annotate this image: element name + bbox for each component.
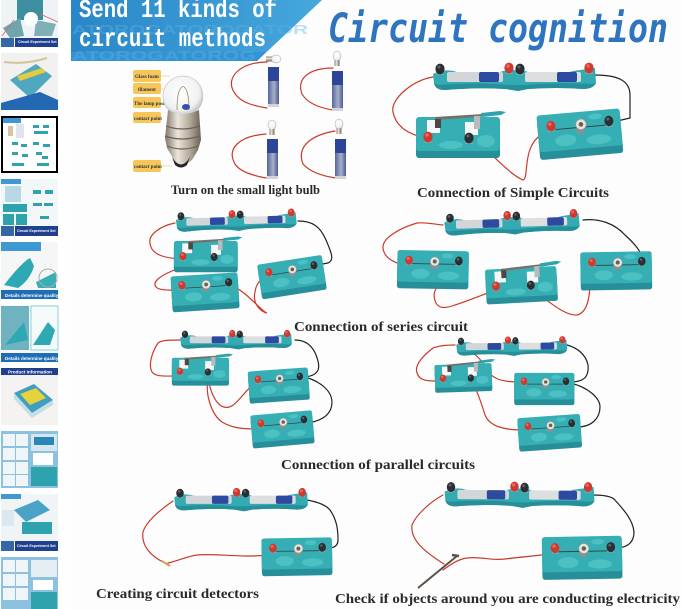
banner pattern: ATOROGATOROG bbox=[72, 48, 256, 63]
thumbnail: kit contents bbox=[1, 431, 58, 488]
panel: small light bulb bbox=[133, 51, 346, 197]
caption: Creating circuit detectors bbox=[96, 587, 260, 602]
panel: series circuit 2 bbox=[383, 209, 652, 315]
bulb part labels: filament bbox=[138, 88, 156, 93]
bulb part labels: The lamp post bbox=[134, 102, 165, 107]
thumbnail: video: Circuit Experiment Set bbox=[18, 40, 57, 44]
caption: Check if objects around you are conducting electricity bbox=[335, 592, 680, 607]
panel: parallel circuit 2 bbox=[416, 336, 600, 452]
thumbnail: video bbox=[1, 0, 58, 47]
thumbnail: STEM set: Circuit Experiment Set bbox=[17, 229, 56, 233]
caption: Turn on the small light bulb bbox=[171, 182, 320, 197]
thumbnail: spring clip comparison bbox=[1, 305, 59, 362]
bulb part labels: Glass foam bbox=[135, 75, 160, 80]
thumbnail: hot clip connections: Details determine quality bbox=[5, 293, 59, 298]
thumbnail: selected overview bbox=[1, 116, 58, 173]
bulb part labels: contact point bbox=[134, 165, 162, 170]
banner bbox=[71, 0, 322, 63]
banner text: circuit methods bbox=[79, 24, 266, 54]
bulb part labels: contact point bbox=[134, 117, 162, 122]
thumbnail strip bbox=[1, 0, 59, 609]
thumbnail: STEM box: Circuit Experiment Set bbox=[17, 544, 56, 548]
bulb part labels bbox=[133, 70, 165, 172]
panel: conductivity check bbox=[335, 481, 680, 607]
thumbnail: box bbox=[1, 53, 58, 110]
panel: simple circuit bbox=[393, 63, 630, 201]
thumbnail: product information: Product Information bbox=[8, 370, 52, 374]
caption: parallel circuits: Connection of parallel circuits bbox=[281, 458, 476, 473]
banner text bbox=[79, 0, 277, 54]
thumbnail: hot clip connections bbox=[1, 242, 59, 299]
bulb and battery circuits bbox=[231, 51, 346, 179]
thumbnail: STEM set bbox=[1, 179, 58, 236]
thumbnail: product information bbox=[1, 368, 58, 425]
banner pattern bbox=[72, 22, 309, 63]
thumbnail: STEM box bbox=[1, 494, 58, 551]
caption: Connection of Simple Circuits bbox=[417, 186, 610, 201]
panel: series circuit 1 bbox=[150, 208, 332, 313]
icon: large light bulb bbox=[161, 76, 203, 168]
thumbnail: kit contents 2 bbox=[1, 557, 58, 609]
panel: parallel circuit 1 bbox=[150, 330, 332, 449]
banner pattern: ATOROGATOROGATOR bbox=[72, 22, 309, 37]
thumbnail: spring clip comparison: Details determine quality bbox=[5, 356, 59, 361]
caption: series circuit: Connection of series circuit bbox=[294, 319, 469, 334]
panel: circuit detector bbox=[96, 488, 338, 602]
